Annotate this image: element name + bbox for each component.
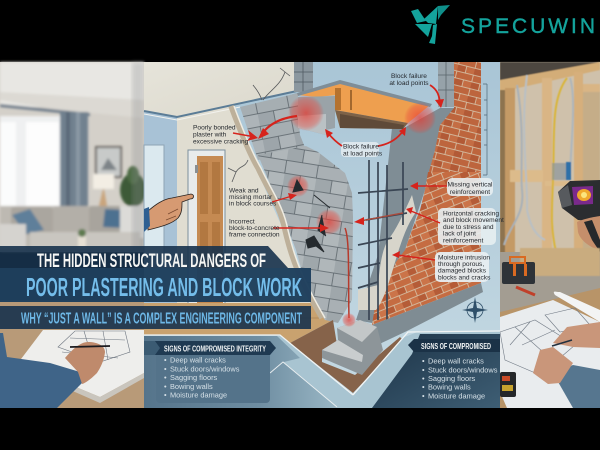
panel: signs of compromised — [353, 331, 500, 408]
arrow: incorrect connection — [273, 227, 323, 229]
hands — [533, 347, 573, 384]
block wall — [240, 93, 353, 323]
bullet list: Sagging floors — [170, 373, 218, 382]
bullet list: • — [422, 356, 425, 366]
title banner — [0, 246, 311, 329]
bullet list — [422, 356, 498, 400]
bullet list: Sagging floors — [428, 374, 476, 383]
sleeve — [553, 365, 600, 408]
arrow: poorly bonded plaster — [233, 133, 255, 137]
label: block-to-concrete: frame connection — [229, 232, 280, 238]
bullet list: Deep wall cracks — [428, 356, 484, 366]
bullet list: • — [422, 392, 425, 400]
arrow: block failure left — [328, 133, 342, 146]
bullet list: Stuck doors/windows — [170, 364, 240, 374]
arrow: to block movement — [360, 213, 403, 221]
label: horizontal cracking: lack of joint — [443, 230, 476, 238]
ruler — [483, 84, 487, 175]
label: horizontal cracking: Horizontal cracking — [443, 210, 499, 218]
photo: left living room — [0, 62, 146, 252]
arrow: weak mortar — [272, 196, 292, 202]
heading line 2: POOR PLASTERING AND BLOCK WORK — [26, 272, 302, 302]
bullet list: • — [164, 382, 167, 391]
upper block pillars — [294, 62, 313, 92]
panel: central cutaway illustration — [144, 62, 500, 408]
illustration labels — [193, 73, 504, 282]
label: missing vertical reinforcement: reinforcement — [450, 189, 490, 196]
label: horizontal cracking: and block movement — [443, 217, 504, 224]
damage glow zones — [287, 95, 436, 327]
label: moisture intrusion: damaged blocks — [438, 268, 487, 274]
label: horizontal cracking: reinforcement — [443, 238, 483, 244]
subtitle: WHY “JUST A WALL” IS A COMPLEX ENGINEERING COMPONENT — [21, 310, 302, 328]
logo: Specuwin — [411, 5, 595, 44]
hand — [65, 342, 105, 384]
label: block failure top: at load points — [389, 80, 429, 87]
heading band — [408, 339, 500, 352]
bullet list: • — [422, 374, 425, 383]
label: moisture intrusion: Moisture intrusion — [438, 254, 490, 262]
pen — [70, 346, 110, 347]
soil — [290, 320, 403, 393]
bullet list: Bowing walls — [428, 382, 471, 392]
arrow: moisture — [397, 255, 435, 260]
bullet list: • — [164, 390, 167, 400]
bullet list: Bowing walls — [170, 382, 213, 391]
label: moisture intrusion: blocks and cracks — [438, 274, 491, 282]
foundation — [372, 283, 483, 346]
banner shapes — [0, 246, 311, 329]
hand — [577, 216, 600, 250]
bullet list: Moisture damage — [428, 392, 485, 400]
photo: right desk with blueprint — [500, 248, 600, 408]
panel: signs of compromised integrity — [144, 335, 372, 408]
label: poorly bonded plaster: plaster with — [193, 132, 227, 138]
arrow: block failure top — [430, 85, 440, 102]
label: block failure lower: at load points — [343, 150, 383, 158]
footing — [322, 320, 383, 375]
label: poorly bonded plaster: Poorly bonded — [193, 124, 236, 132]
toolbox — [502, 257, 535, 284]
brand name: SPECUWIN — [461, 15, 595, 38]
crown moulding — [144, 91, 297, 117]
concrete rubble strip — [358, 195, 416, 310]
photo: right framing with thermal camera — [500, 62, 600, 258]
red arrows — [233, 85, 447, 260]
label: moisture intrusion: through porous, — [438, 261, 484, 268]
bullet list: • — [164, 364, 167, 374]
plaster edge — [231, 106, 322, 318]
label: weak mortar: in block courses — [229, 200, 277, 208]
icon: origami bird — [411, 5, 450, 44]
label: block-to-concrete: Incorrect — [229, 218, 255, 226]
bricks — [372, 62, 481, 325]
label: block failure lower: Block failure — [343, 144, 379, 150]
callout bubbles — [341, 142, 496, 282]
icon: compass — [462, 297, 488, 323]
arrowheads — [247, 99, 444, 258]
photo: left desk with blueprint and writing hand — [0, 300, 144, 408]
list background — [156, 352, 270, 403]
multimeter — [500, 372, 516, 397]
heading: SIGNS OF COMPROMISED INTEGRITY — [164, 344, 266, 354]
heading band — [144, 341, 161, 355]
bullet list: Stuck doors/windows — [428, 366, 498, 374]
bullet list — [164, 356, 240, 400]
label: block-to-concrete: block-to-concrete — [229, 225, 280, 232]
arrow: horizontal cracking — [411, 211, 440, 223]
bullet list: • — [422, 382, 425, 392]
label: weak mortar: missing mortar — [229, 194, 273, 201]
bullet list: • — [164, 356, 167, 364]
floor — [144, 303, 333, 343]
bullet list: • — [422, 366, 425, 374]
arrow: beam failure to plaster — [261, 116, 297, 135]
label: missing vertical reinforcement: Missing vertical — [447, 182, 493, 188]
label: poorly bonded plaster: excessive cracking — [193, 138, 249, 146]
room wall — [144, 62, 297, 117]
thermal camera — [558, 180, 600, 222]
red rebar — [345, 228, 349, 318]
heading line 1: THE HIDDEN STRUCTURAL DANGERS OF — [37, 250, 266, 272]
concrete lintel — [298, 96, 335, 135]
bullet list: Moisture damage — [170, 390, 227, 400]
heading: SIGNS OF COMPROMISED — [421, 342, 491, 351]
blueprint — [500, 292, 600, 408]
beam — [297, 80, 432, 129]
arrow: missing reinforcement — [415, 185, 447, 187]
door — [188, 150, 225, 305]
sleeve — [0, 333, 82, 408]
grey core behind rebar — [356, 108, 454, 323]
label: horizontal cracking: due to stress and — [443, 224, 494, 231]
bullet list: • — [164, 373, 167, 382]
label: weak mortar: Weak and — [229, 188, 259, 194]
rebar — [358, 160, 408, 320]
arrow: block failure right — [378, 131, 403, 146]
wall cracks — [228, 68, 290, 182]
bullet list: Deep wall cracks — [170, 356, 226, 364]
label: block failure top: Block failure — [391, 73, 427, 80]
icon: pointing hand — [144, 194, 194, 232]
